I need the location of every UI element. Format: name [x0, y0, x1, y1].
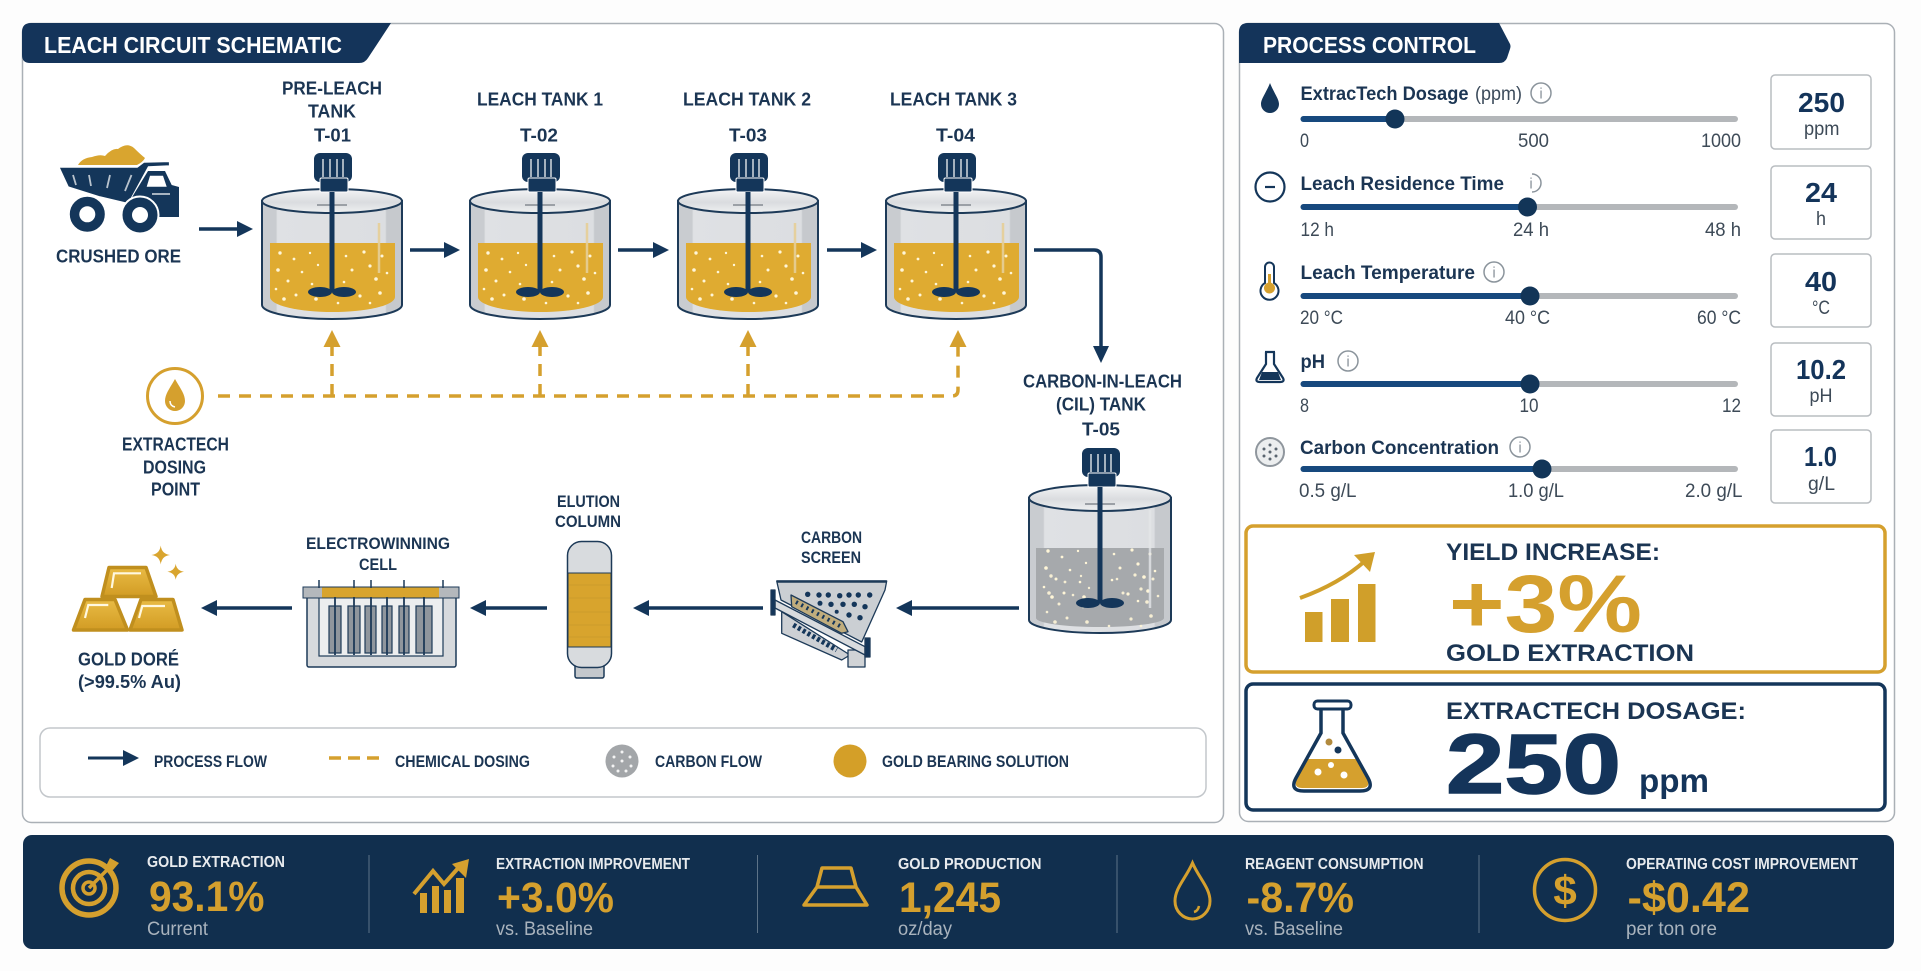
label: carbon concentration: Carbon Concentration [1300, 437, 1499, 459]
legend: gold bearing solution [834, 744, 1069, 778]
KPI: operating cost improvement [1534, 856, 1858, 940]
legend: carbon flow: CARBON FLOW [655, 753, 762, 771]
text: gold production: 1,245 [899, 874, 1001, 922]
scale labels [1300, 131, 1741, 152]
scale labels: 8 [1300, 396, 1309, 417]
scale labels: 10 [1520, 396, 1538, 417]
text: reagent consumption: vs. Baseline [1245, 919, 1343, 940]
text: operating cost improvement: OPERATING COST IMPROVEMENT [1626, 856, 1858, 873]
label: leach tank 3 T-04 [890, 90, 1017, 146]
label: carbon screen: SCREEN [801, 549, 861, 567]
KPI bar [23, 835, 1894, 949]
scale labels: 60 °C [1697, 308, 1741, 329]
icon: clock [1256, 172, 1284, 202]
slider: carbon [1300, 460, 1738, 478]
label: leach tank 2 T-03 [683, 90, 811, 146]
label: CIL tank T-05: T-05 [1082, 420, 1120, 440]
label: leach tank 3 T-04: LEACH TANK 3 [890, 90, 1017, 110]
label: gold dore: (>99.5% Au) [78, 672, 181, 692]
label: extractech dosing point: EXTRACTECH [122, 434, 229, 454]
label: pH: i [1346, 354, 1350, 370]
label: electrowinning cell: CELL [359, 556, 397, 574]
icon: small flask [1256, 352, 1284, 382]
slider: dosage [1300, 110, 1738, 128]
icon: flask with gold liquid [1294, 701, 1370, 791]
scale labels: 20 °C [1300, 308, 1343, 329]
arrow: T-04 to CIL tank [1034, 250, 1109, 363]
text: gold extraction: Current [147, 919, 209, 940]
icon: gold dore bars [74, 546, 184, 630]
scale labels: 40 °C [1505, 308, 1550, 329]
arrow: elution column to electrowinning [470, 600, 547, 616]
scale labels [1300, 308, 1741, 329]
label: carbon concentration: i [1518, 440, 1522, 456]
icon: carbon screen [771, 581, 887, 667]
legend: process flow [88, 750, 267, 771]
scale labels: 0 [1300, 131, 1309, 152]
label: gold dore [78, 648, 181, 692]
text: operating cost improvement: per ton ore [1626, 919, 1717, 940]
control: carbon concentration [1256, 430, 1871, 503]
text: extraction improvement [496, 856, 690, 940]
scale labels: 12 h [1300, 220, 1334, 241]
scale labels: 500 [1518, 131, 1549, 152]
icon: rising bar chart [1300, 552, 1376, 642]
callout: yield increase [1246, 526, 1885, 672]
icon: elution column [568, 542, 612, 678]
tank: CIL T-05 [1029, 448, 1171, 633]
scale labels [1299, 481, 1742, 502]
tank: T-02 [470, 153, 610, 319]
value box: 40 C: 40 [1805, 266, 1837, 297]
label: extractech dosage: (ppm) [1475, 83, 1522, 105]
label: CIL tank T-05: CARBON-IN-LEACH [1023, 372, 1182, 392]
text: gold production: GOLD PRODUCTION [898, 856, 1042, 873]
text: extraction improvement: EXTRACTION IMPROVEMENT [496, 856, 690, 873]
label: CIL tank T-05: (CIL) TANK [1056, 394, 1146, 414]
label: elution column: ELUTION [557, 493, 620, 511]
legend: gold bearing solution: GOLD BEARING SOLUTION [882, 753, 1069, 771]
label: leach tank 3 T-04: T-04 [936, 126, 975, 146]
label: electrowinning cell [306, 535, 450, 574]
control: leach temperature [1261, 254, 1871, 329]
value box: 10.2 pH: 10.2 [1796, 354, 1846, 385]
panel heading: process control: PROCESS CONTROL [1263, 32, 1476, 58]
arrow: T-03 to T-04 [827, 242, 877, 258]
icon: dollar coin: $ [1553, 867, 1577, 914]
slider: temperature [1300, 286, 1738, 306]
slider: residence time [1300, 198, 1738, 216]
label: leach temperature: Leach Temperature [1300, 262, 1475, 284]
label: leach tank 1 T-02: LEACH TANK 1 [477, 90, 603, 110]
value: +3%: +3% [1449, 559, 1642, 650]
label: extractech dosage: i [1539, 86, 1543, 102]
value: 250 ppm [1446, 717, 1709, 811]
label: carbon screen: CARBON [801, 529, 862, 547]
value: 250 ppm: 250 [1446, 717, 1621, 811]
icon: thermometer [1261, 262, 1278, 300]
arrow: T-02 to T-03 [618, 242, 669, 258]
value box: 24 h [1771, 166, 1871, 239]
tank: T-04 [886, 153, 1026, 319]
text: gold extraction [147, 854, 285, 940]
label: pre-leach tank T-01: PRE-LEACH [282, 78, 382, 98]
icon: drop outline [1175, 863, 1210, 919]
label: pH [1300, 351, 1358, 373]
text: extraction improvement: vs. Baseline [496, 919, 593, 940]
KPI: gold production [804, 856, 1042, 940]
value box: 24 h: 24 [1805, 177, 1837, 208]
label: carbon screen [801, 529, 862, 567]
scale labels: 1000 [1701, 131, 1741, 152]
label: extractech dosing point: DOSING [143, 458, 206, 478]
label: extractech dosing point [122, 434, 229, 500]
label: leach tank 2 T-03: LEACH TANK 2 [683, 90, 811, 110]
tank: T-01 [262, 153, 402, 319]
text: gold extraction: GOLD EXTRACTION [147, 854, 285, 871]
legend: chemical dosing: CHEMICAL DOSING [395, 753, 530, 771]
value box: 250 ppm: 250 [1798, 87, 1845, 118]
icon: drop [1261, 83, 1279, 113]
icon: electrowinning cell [303, 580, 459, 667]
legend [40, 728, 1206, 797]
label: pre-leach tank T-01 [282, 78, 382, 146]
value box: 250 ppm: ppm [1804, 119, 1840, 140]
legend: carbon flow [606, 744, 762, 778]
icon: target [62, 858, 119, 915]
callout: extractech dosage [1246, 684, 1885, 811]
scale labels: 1.0 g/L [1508, 481, 1564, 502]
text: gold production: oz/day [898, 919, 952, 940]
label: leach residence time: Leach Residence Time [1300, 173, 1504, 195]
label: leach tank 2 T-03: T-03 [729, 126, 767, 146]
label: extractech dosage: EXTRACTECH DOSAGE: [1446, 698, 1746, 725]
arrow: ore to pre-leach tank [199, 221, 253, 237]
scale labels: 12 [1722, 396, 1741, 417]
control: leach residence time [1256, 166, 1871, 241]
label: electrowinning cell: ELECTROWINNING [306, 535, 450, 553]
label: pre-leach tank T-01: TANK [308, 102, 356, 122]
label: gold extraction: GOLD EXTRACTION [1446, 640, 1694, 667]
icon: dollar coin [1534, 860, 1596, 920]
text: gold production [898, 856, 1042, 940]
KPI: reagent consumption [1175, 856, 1424, 940]
label: extractech dosage: ExtracTech Dosage [1300, 83, 1469, 105]
label: yield increase: YIELD INCREASE: [1446, 539, 1660, 566]
text: reagent consumption [1245, 856, 1424, 940]
slider: pH [1300, 374, 1738, 394]
value box: 250 ppm [1771, 75, 1871, 149]
panel heading: leach circuit schematic: LEACH CIRCUIT SCHEMATIC [44, 32, 342, 58]
value box: 40 C: °C [1812, 298, 1830, 319]
text: reagent consumption: -8.7% [1246, 874, 1354, 922]
value box: 1.0 g/L [1771, 430, 1871, 503]
control: pH [1256, 343, 1871, 417]
label: crushed ore: CRUSHED ORE [56, 246, 181, 266]
label: leach residence time: i [1529, 176, 1533, 192]
label: pre-leach tank T-01: T-01 [314, 126, 351, 146]
icon: gold bar [804, 868, 867, 905]
label: leach tank 1 T-02: T-02 [520, 126, 558, 146]
KPI: gold extraction [62, 854, 285, 940]
scale labels [1300, 220, 1741, 241]
label: leach temperature: i [1492, 264, 1496, 282]
panel: process control [1239, 23, 1894, 822]
text: extraction improvement: +3.0% [497, 874, 614, 922]
text: operating cost improvement [1626, 856, 1858, 940]
text: reagent consumption: REAGENT CONSUMPTION [1245, 856, 1424, 873]
value: 250 ppm: ppm [1639, 762, 1709, 799]
value box: 1.0 g/L: 1.0 [1804, 441, 1837, 472]
tank: T-03 [678, 153, 818, 319]
scale labels: 24 h [1513, 220, 1549, 241]
label: elution column [555, 493, 621, 531]
scale labels: 0.5 g/L [1299, 481, 1356, 502]
label: elution column: COLUMN [555, 513, 621, 531]
label: leach tank 1 T-02 [477, 90, 603, 146]
value box: 24 h: h [1816, 209, 1826, 230]
label: extractech dosing point: POINT [151, 480, 200, 500]
icon: extractech dosing point [148, 368, 202, 424]
label: CIL tank T-05 [1023, 372, 1182, 440]
scale labels: 48 h [1705, 220, 1741, 241]
panel: leach circuit schematic [22, 23, 1224, 822]
icon: ore truck [59, 145, 179, 234]
value box: 1.0 g/L: g/L [1808, 474, 1835, 495]
icon: carbon [1256, 438, 1284, 466]
label: pH: pH [1300, 351, 1325, 373]
scale labels [1300, 396, 1741, 417]
arrow: T-01 to T-02 [410, 242, 460, 258]
control: extractech dosage [1261, 75, 1871, 152]
KPI: extraction improvement [414, 856, 690, 940]
value box: 40 C [1771, 254, 1871, 327]
arrow: electrowinning to gold [201, 600, 292, 616]
label: gold dore: GOLD DORÉ [78, 648, 179, 670]
arrow: CIL to carbon screen [896, 600, 1019, 616]
scale labels: 2.0 g/L [1685, 481, 1742, 502]
arrow: carbon screen to elution column [633, 600, 763, 616]
panel heading: leach circuit schematic [22, 23, 391, 63]
dashed chemical dosing line [218, 330, 966, 396]
panel heading: process control [1239, 23, 1510, 63]
value box: 10.2 pH [1771, 343, 1871, 416]
text: gold extraction: 93.1% [149, 873, 264, 921]
value box: 10.2 pH: pH [1810, 386, 1832, 407]
text: operating cost improvement: -$0.42 [1628, 874, 1750, 922]
icon: growth chart [414, 859, 469, 913]
legend: process flow: PROCESS FLOW [154, 753, 267, 771]
